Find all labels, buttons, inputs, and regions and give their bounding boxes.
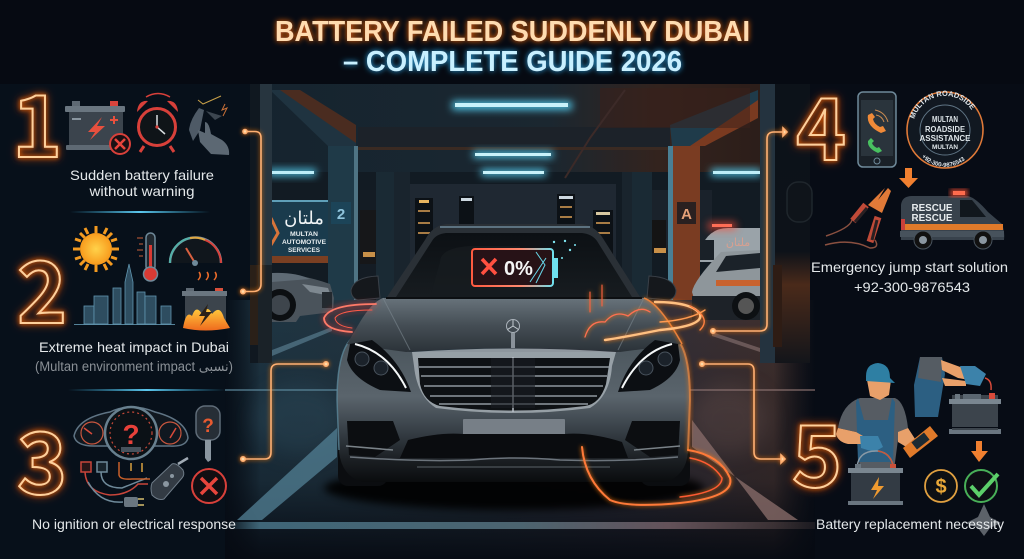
caption: Emergency jump start solution [811,259,1008,275]
panel 5: battery replacement [792,357,1004,536]
title: BATTERY FAILED SUDDENLY DUBAI [275,16,750,48]
ceiling beams [358,127,670,147]
icon: roadside badge: MULTAN [932,145,958,151]
caption: No ignition or electrical response [32,516,236,532]
lower intakes [346,421,680,467]
icon: city skyline [74,264,175,324]
caption: (Multan environment impact نسبی) [35,359,233,374]
connector 1 to 2 [241,130,261,294]
garage scene [225,84,815,559]
sign: Multan Automotive Services: MULTAN [290,231,318,238]
sign: A [677,202,696,224]
headlights [347,340,680,392]
sign: 2 [331,202,351,224]
battery warning display [472,240,576,286]
icon: rescue van [900,189,1004,249]
floor [225,300,815,559]
caption: +92-300-9876543 [854,279,970,295]
connector 4 [711,128,787,333]
icon: roadside badge: ROADSIDE [925,125,966,134]
grille [412,348,616,413]
body [337,340,690,482]
inner pillars [328,146,358,321]
caption [70,167,214,199]
icon: roadside badge: MULTAN [932,115,958,124]
caption: Sudden battery failure [70,167,214,183]
icon: phone [858,92,896,167]
number 5: 5 [792,389,842,512]
icon: dashboard [74,407,188,459]
connector 3 [241,362,328,461]
icon: car key: ? [202,416,214,437]
sign: 2: 2 [337,206,345,223]
connector 5 [700,362,785,463]
arrow down [971,441,988,462]
right edge pillar [760,84,812,363]
panel 1: sudden battery failure [12,59,229,199]
title [275,16,750,78]
icon: mechanic [836,363,938,470]
sign: Multan Automotive Services: ملتان [284,208,324,229]
left edge pillar [250,84,272,363]
icon: red X [192,469,226,503]
mirrors [351,276,380,300]
icon: alarm clock [137,94,178,152]
icon: roadside badge: MULTAN ROADSIDE [910,90,976,119]
tyres [338,440,388,486]
parked rescue van right: ملتان [726,236,750,249]
arrow down [899,168,918,188]
star emblem [506,320,520,348]
icon: thermometer [137,233,158,281]
icon: burning battery [182,272,230,330]
electric swirls [324,285,730,505]
icon: dashboard: ? [122,419,140,450]
ceiling [258,84,790,184]
icon: green check [965,470,998,502]
roof and windscreen [385,224,642,300]
number 3: 3 [17,396,67,519]
icon: wires and plug [81,462,150,507]
icon: hand pressing [189,96,229,155]
icon: dollar coin: $ [935,476,947,498]
car [324,224,704,510]
sign: Multan Automotive Services: SERVICES [288,247,321,254]
title: – COMPLETE GUIDE 2026 [343,46,682,78]
sign: Multan Automotive Services: AUTOMOTIVE [282,239,327,246]
sparkle [966,504,1001,536]
parked car left [264,273,334,322]
icon: roadside badge: +92-300-9876543 [923,155,964,167]
sign: A: A [681,206,692,223]
ceiling lights [268,101,761,176]
back wall [270,172,760,307]
caption: Battery replacement necessity [816,516,1004,532]
caption [35,339,233,374]
hood [347,298,682,352]
caption [811,259,1008,295]
number plate [463,419,565,442]
caption: Extreme heat impact in Dubai [39,339,229,355]
panel 2: extreme heat [17,225,233,374]
icon: battery with bolt [848,451,903,505]
icon: jumper cables [825,188,891,248]
icon: hands replacing battery [914,357,1001,434]
icon: roadside badge: ASSISTANCE [920,134,971,143]
icon: key fob [151,458,188,500]
parked rescue van right [692,222,760,320]
icon: rescue van: RESCUE [912,202,952,214]
number 4: 4 [796,62,846,185]
icon: sun [73,226,119,272]
icon: gauge [170,238,221,266]
side windows [360,190,384,305]
icon: battery with X [65,101,130,154]
icon: dollar coin [925,470,957,502]
city window [410,184,616,304]
icon: car key [196,406,220,462]
icon: roadside badge [906,90,984,169]
panel 3: no ignition [17,396,236,532]
battery warning display: 0% [504,258,533,280]
icon: rescue van: RESCUE [912,212,952,224]
sign: Multan Automotive Services [270,200,328,263]
panel 4: emergency jump start [790,62,1008,295]
number 1: 1 [12,59,62,182]
number 2: 2 [17,225,67,348]
caption: without warning [88,183,194,199]
